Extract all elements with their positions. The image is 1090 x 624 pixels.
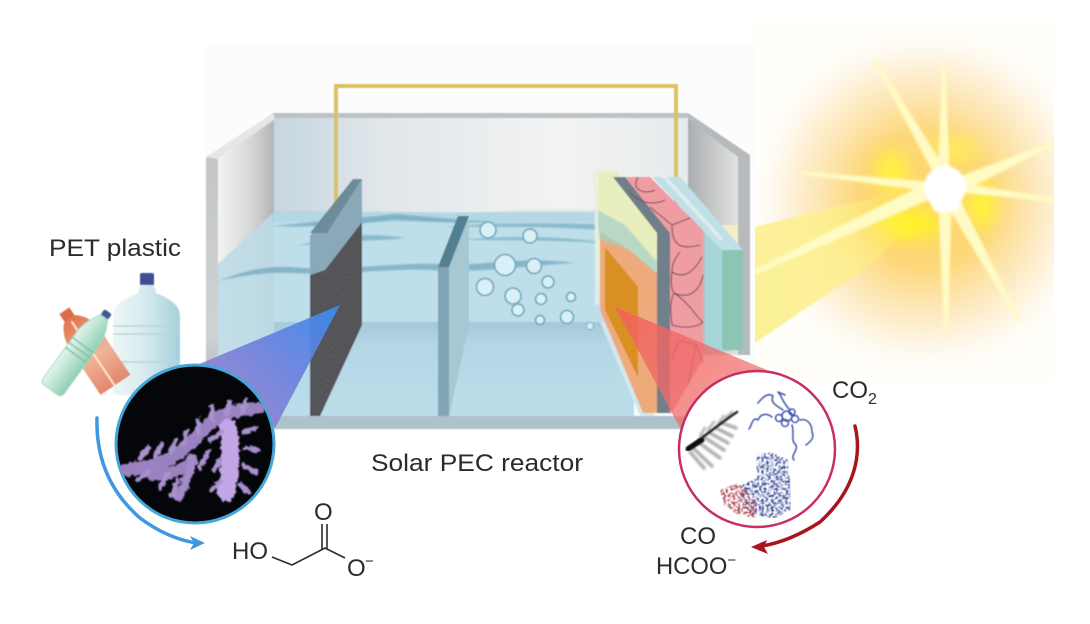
light beam from sun to reactor — [750, 190, 925, 345]
chemical structure: glycolate: − — [365, 553, 374, 570]
chemical structure: glycolate — [232, 499, 374, 582]
tank top rim and frames — [206, 113, 750, 407]
red zoom beam to catalyst circle — [615, 307, 767, 428]
arrow: red process arrow — [751, 426, 857, 554]
right photocathode assembly — [593, 168, 743, 415]
label: HCOO-: − — [727, 552, 736, 569]
tank back wall — [274, 113, 688, 323]
arrow: blue process arrow — [97, 418, 205, 550]
water shading over glass — [594, 208, 657, 275]
bubbles — [476, 222, 594, 330]
label: CO: CO — [680, 523, 716, 550]
gold wire — [336, 86, 676, 205]
icon: blue ribbon molecule — [749, 392, 813, 460]
sunlight glow panel — [755, 20, 1054, 382]
sun star rays — [752, 59, 1054, 330]
label: HCOO-: HCOO — [656, 553, 728, 580]
orange absorber — [605, 247, 638, 377]
blue zoom beam to anode micrograph — [197, 305, 340, 428]
label: PET plastic: PET plastic — [49, 235, 181, 262]
teal back plate — [653, 177, 743, 352]
orange bottle — [50, 300, 130, 395]
cracked texture — [628, 177, 703, 385]
icon: enzyme protein, blue subunit — [740, 452, 791, 518]
chemical structure: glycolate: HO — [232, 538, 268, 565]
icon: PET plastic bottles — [40, 273, 180, 398]
circle: catalysts — [679, 371, 835, 527]
lilac dendrite — [127, 400, 258, 497]
tank left side wall — [218, 118, 274, 416]
label: Solar PEC reactor: Solar PEC reactor — [371, 450, 583, 477]
glass front pane — [593, 168, 657, 413]
water volume — [218, 212, 655, 417]
icon: feather-like carbon catalyst — [688, 412, 737, 468]
glass edge highlight — [596, 170, 722, 305]
icon: enzyme protein, red subunit — [720, 483, 757, 518]
label: CO2: 2 — [868, 391, 877, 408]
chemical structure: glycolate: O — [347, 555, 366, 582]
bottom rail — [274, 416, 684, 429]
tank right side wall — [688, 118, 738, 355]
glass separator membrane — [438, 216, 469, 416]
faint background behind reactor — [205, 45, 755, 430]
chemical structure: glycolate: O — [314, 499, 333, 526]
circle: anode micrograph with dendrite — [116, 365, 274, 523]
grey edge — [613, 177, 670, 413]
label: CO2: CO — [832, 377, 868, 404]
pink photosystem face — [625, 177, 703, 415]
water surface waves — [219, 209, 620, 281]
peach layer — [600, 232, 657, 413]
dark electrode (anode) — [310, 179, 362, 416]
water jug — [113, 273, 180, 395]
green bottle — [40, 304, 118, 398]
panel: solar PEC reactor tank — [206, 86, 750, 429]
